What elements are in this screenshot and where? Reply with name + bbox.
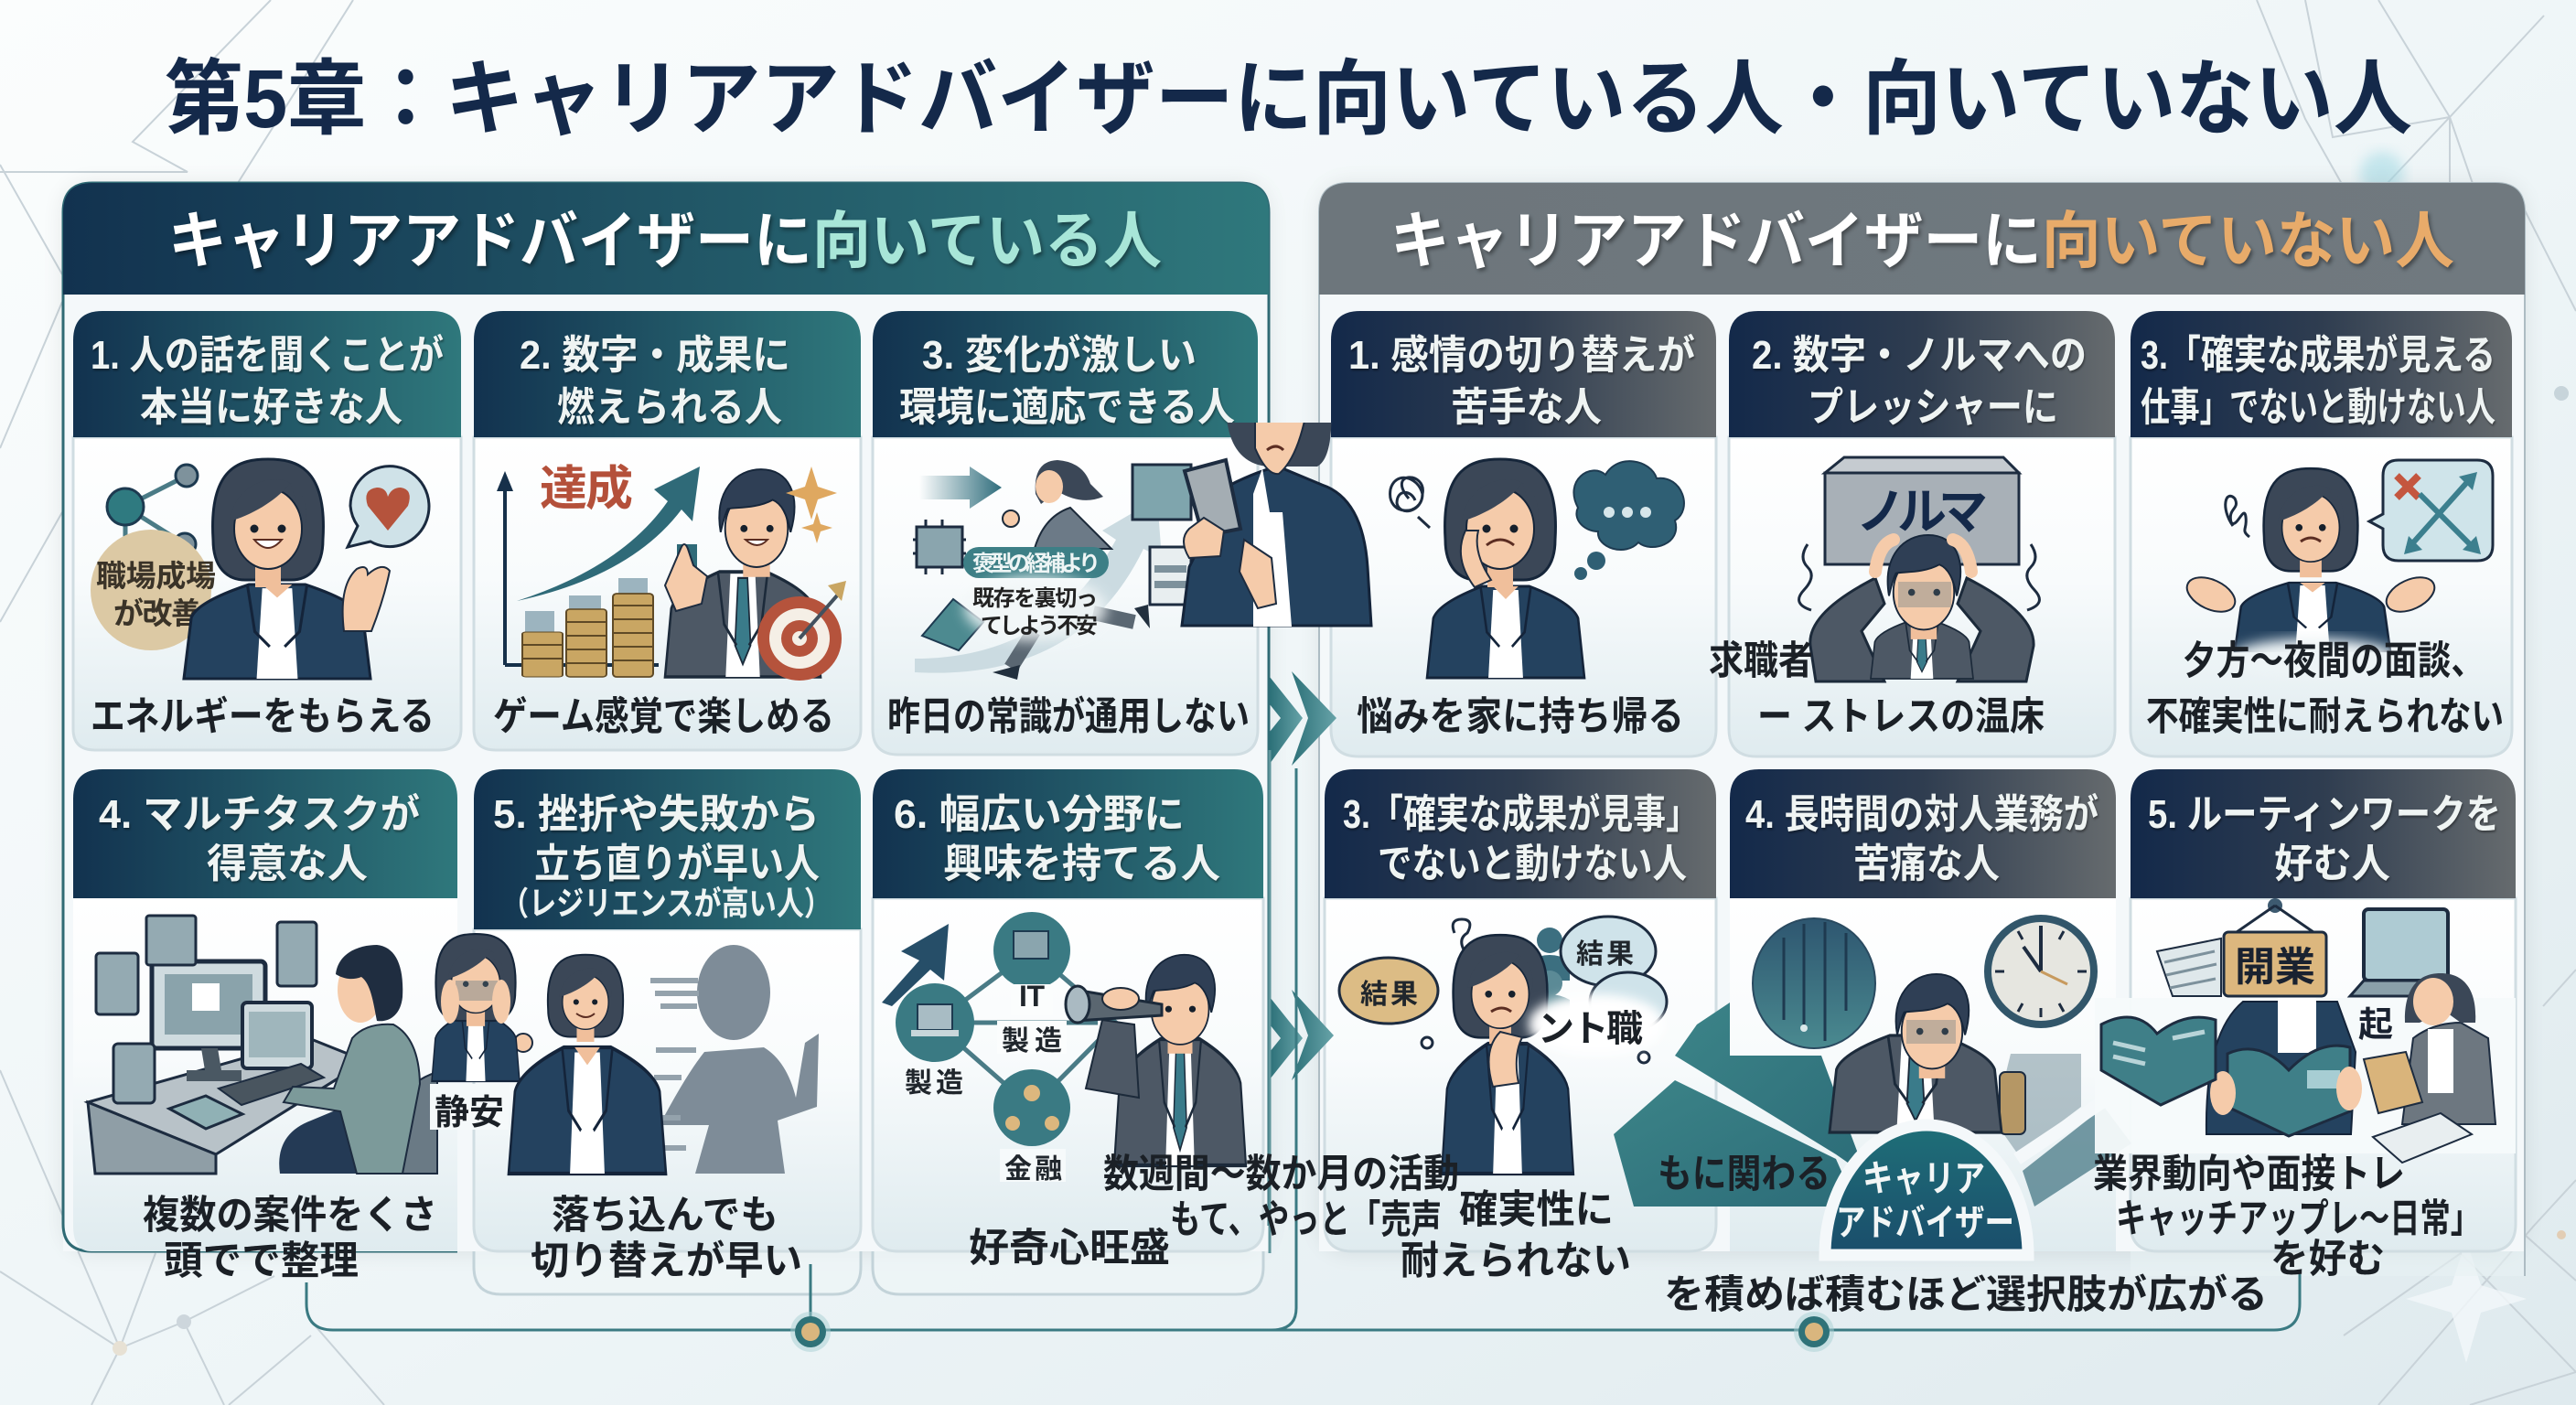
sign 開業 xyxy=(2224,898,2326,996)
floating text: 選択肢が広がる: を積めば積むほど選択肢が広がる xyxy=(1664,1273,2268,1317)
card: マルチタスク: 頭でで整理 xyxy=(164,1239,359,1283)
card: 挫折や失敗から立ち直り: 切り替えが早い xyxy=(531,1239,802,1283)
icon: sparkles xyxy=(786,467,837,543)
card: 挫折や失敗から立ち直り xyxy=(474,769,861,1283)
illustration: routine worker scene xyxy=(2095,898,2516,1163)
reader woman xyxy=(2206,1002,2356,1134)
illustration: smiling woman xyxy=(184,459,390,679)
illustration: change scene: てしよう不安 xyxy=(981,614,1098,638)
illustration: network nodes xyxy=(107,465,198,585)
card: マルチタスク: 得意な人 xyxy=(207,842,368,886)
papers xyxy=(2157,938,2221,996)
panel header: not suited xyxy=(1319,183,2525,295)
card: 確実な成果が見事 xyxy=(1325,769,1716,1251)
floating text: 業界動向: 業界動向や面接トレ xyxy=(2093,1153,2405,1196)
card: 幅広い分野 xyxy=(873,769,1263,1271)
illustration: gold badge xyxy=(91,530,216,650)
chart: growth bars and coins: 達成 xyxy=(540,463,633,516)
illustration: quota box crushing man xyxy=(1799,457,2039,681)
chevron arrow: row 2 xyxy=(1270,990,1334,1080)
panel header: not suited: キャリアアドバイザーに向いていない人 xyxy=(1390,207,2454,276)
floating text: white blob with ント職 xyxy=(1532,1001,1660,1052)
floating text: を好む: を好む xyxy=(2270,1238,2385,1282)
connector timeline xyxy=(306,750,2300,1352)
illustration: gold badge: が改善 xyxy=(113,596,201,630)
card: 長時間の対人業務が苦痛: 苦痛な人 xyxy=(1853,842,2000,886)
card: 感情の切り替えが苦手 xyxy=(1331,311,1716,756)
icon: target with dart xyxy=(757,581,846,681)
card: 挫折や失敗から立ち直り: 立ち直りが早い人 xyxy=(534,842,820,886)
illustration: distressed woman xyxy=(432,934,520,1081)
label: 求職者: 求職者 xyxy=(1709,639,1813,683)
illustration: multitasking at desk xyxy=(88,916,437,1174)
open book left xyxy=(2101,1017,2216,1105)
sign 開業: 開業 xyxy=(2235,945,2315,990)
card: マルチタスク: 複数の案件をくさ xyxy=(143,1194,437,1238)
node right xyxy=(1794,1312,1834,1352)
card: 挫折や失敗から立ち直り: 5. 挫折や失敗から xyxy=(493,792,820,837)
card: 数字・成果に燃えられる: 2. 数字・成果に xyxy=(520,333,790,378)
illustration: gold badge: 職場成場 xyxy=(96,559,216,593)
floating text: 数週間〜数か月の活動: 数週間〜数か月の活動 xyxy=(1103,1153,1459,1196)
floating text: 耐えられない: 耐えられない xyxy=(1401,1239,1631,1283)
illustration: pondering woman with bubbles: 結果 xyxy=(1576,939,1634,970)
card: 変化が激しい環境 xyxy=(873,311,1371,755)
card: 人の話を聞くことが好き: 1. 人の話を聞くことが xyxy=(91,333,444,378)
card: 数字・ノルマへのプレッシャーに: ー ストレスの温床 xyxy=(1757,695,2045,739)
floating text: やっと「売声: もて、やっと「売声 xyxy=(1170,1198,1442,1242)
floating text: キャッチアップ: キャッチアップレ〜日常」 xyxy=(2116,1197,2481,1241)
card: 確実な成果が見える仕事: 不確実性に耐えられない xyxy=(2146,695,2504,739)
card: 数字・ノルマへのプレッシャーに xyxy=(1729,311,2115,756)
card: 数字・成果に燃えられる: ゲーム感覚で楽しめる xyxy=(493,695,834,739)
card: ルーティンワークを好む: 5. ルーティンワークを xyxy=(2148,792,2501,837)
card: 確実な成果が見える仕事 xyxy=(2131,311,2512,756)
floating text: もに関わる: もに関わる xyxy=(1658,1153,1830,1196)
illustration: gloomy circle xyxy=(1753,918,1875,1048)
card: 変化が激しい環境: 3. 変化が激しい xyxy=(922,333,1197,378)
chart: growth bars and coins xyxy=(497,463,700,677)
illustration: industry network: IT xyxy=(1019,980,1045,1013)
illustration: routine worker scene: 起 xyxy=(2358,1006,2393,1045)
card: 長時間の対人業務が苦痛: 4. 長時間の対人業務が xyxy=(1745,792,2098,837)
illustration: industry network: 製造 xyxy=(1002,1026,1062,1056)
caption: evening interviews: 夕方〜夜間の面談、 xyxy=(2183,639,2485,683)
floating text: 確実性に: 確実性に xyxy=(1459,1188,1614,1232)
title: 第5章：キャリアアドバイザーに向いている人・向いていない人 xyxy=(165,54,2412,145)
illustration: industry network: 製造 xyxy=(905,1068,963,1099)
card: 数字・ノルマへのプレッシャーに: 2. 数字・ノルマへの xyxy=(1752,333,2087,378)
illustration: change scene xyxy=(913,460,1191,680)
right woman xyxy=(2402,1023,2496,1124)
folder xyxy=(2364,1052,2422,1113)
card: 数字・成果に燃えられる: 燃えられる人 xyxy=(557,385,782,430)
illustration: change scene: 既存を裏切っ xyxy=(972,585,1098,611)
floating text: white blob with ント職: ント職 xyxy=(1538,1009,1643,1049)
card: 感情の切り替えが苦手: 悩みを家に持ち帰る xyxy=(1357,695,1684,739)
card: ルーティンワークを好む xyxy=(2131,769,2516,1251)
card: 人の話を聞くことが好き: エネルギーをもらえる xyxy=(91,695,435,739)
card: 変化が激しい環境: 昨日の常識が通用しない xyxy=(887,695,1250,739)
illustration: industry network xyxy=(882,912,1116,1185)
card: 変化が激しい環境: 環境に適応できる人 xyxy=(899,385,1235,430)
label: 静安: 静安 xyxy=(435,1094,504,1132)
hub: キャリアアドバイザー: アドバイザー xyxy=(1836,1203,2014,1243)
illustration: woman with smartphone xyxy=(1182,402,1371,627)
card: 数字・ノルマへのプレッシャーに: プレッシャーに xyxy=(1808,385,2058,430)
illustration: worried woman xyxy=(1390,459,1684,678)
illustration: pondering woman with bubbles: 結果 xyxy=(1360,980,1418,1010)
card: 幅広い分野: 興味を持てる人 xyxy=(943,842,1220,886)
hub: キャリアアドバイザー: キャリア xyxy=(1862,1159,1985,1199)
illustration: tired man at desk xyxy=(1830,974,2025,1134)
card: 感情の切り替えが苦手: 苦手な人 xyxy=(1451,385,1602,430)
card: 数字・成果に燃えられる xyxy=(474,311,861,750)
panel header: suited: キャリアアドバイザーに向いている人 xyxy=(168,207,1162,276)
card: 幅広い分野: 6. 幅広い分野に xyxy=(894,792,1185,837)
illustration: recovered woman xyxy=(509,955,666,1174)
illustration: pointing man xyxy=(665,469,821,677)
paper stack xyxy=(2373,1113,2472,1163)
card: 人の話を聞くことが好き xyxy=(73,311,461,750)
illustration: man with telescope xyxy=(1066,955,1246,1165)
illustration: unsure woman with arrows xyxy=(2182,460,2493,675)
chevron arrow: row 1 xyxy=(1270,671,1336,766)
card: 確実な成果が見事: 3.「確実な成果が見事」 xyxy=(1343,792,1699,837)
illustration: industry network: 金融 xyxy=(1004,1154,1062,1185)
card: ルーティンワークを好む: 好む人 xyxy=(2274,842,2390,886)
illustration: wall clock xyxy=(1988,918,2094,1024)
card: マルチタスク xyxy=(73,769,457,1283)
card: 挫折や失敗から立ち直り: （レジリエンスが高い人） xyxy=(501,885,832,922)
ghost glass card backs xyxy=(474,1251,1263,1294)
icon: heart speech bubble xyxy=(348,467,429,547)
card: 長時間の対人業務が苦痛 xyxy=(1730,769,2116,1251)
illustration: change scene: 褒型の経補より xyxy=(972,552,1100,576)
node left xyxy=(790,1312,831,1352)
hub: キャリアアドバイザー xyxy=(1825,1125,2028,1255)
card: マルチタスク: 4. マルチタスクが xyxy=(99,792,420,837)
laptop xyxy=(2364,909,2448,981)
panel header: suited xyxy=(63,183,1269,295)
teal arrows into career adviser hub xyxy=(1614,1003,2131,1207)
card: 人の話を聞くことが好き: 本当に好きな人 xyxy=(140,385,402,430)
panel: suited xyxy=(62,183,1371,1294)
illustration: quota box crushing man: ノルマ xyxy=(1856,485,1988,540)
card: 確実な成果が見事: でないと動けない人 xyxy=(1378,842,1687,886)
illustration: shadow silhouette xyxy=(650,945,819,1174)
panel: not suited xyxy=(1319,183,2525,1276)
card: 幅広い分野: 好奇心旺盛 xyxy=(969,1227,1170,1271)
card: 確実な成果が見える仕事: 3.「確実な成果が見える xyxy=(2141,333,2496,378)
illustration: pondering woman with bubbles xyxy=(1339,917,1667,1174)
card: 感情の切り替えが苦手: 1. 感情の切り替えが xyxy=(1348,333,1695,378)
card: 挫折や失敗から立ち直り: 落ち込んでも xyxy=(552,1194,778,1238)
open book center xyxy=(2227,1046,2350,1136)
